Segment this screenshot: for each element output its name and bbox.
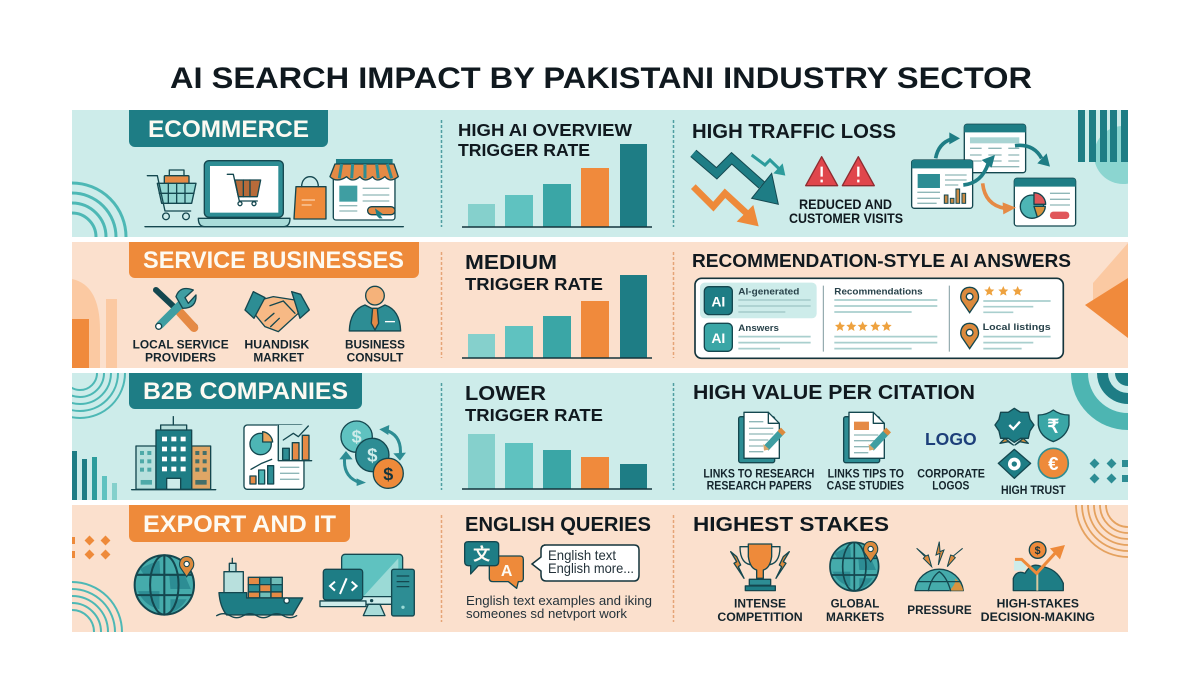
panel: export and IT row	[72, 505, 1128, 632]
dashed dividers	[442, 120, 674, 227]
icon: high-stakes decisions: $	[1035, 545, 1041, 557]
heading: B2B companies: B2B COMPANIES	[143, 378, 348, 405]
text: english examples: someones sd netvport work	[466, 606, 628, 621]
icon: trust badges	[995, 408, 1069, 478]
panel: B2B companies row	[72, 373, 1128, 500]
bar chart: medium trigger rate	[462, 275, 652, 358]
text: reduced customer visits: REDUCED AND	[799, 196, 892, 212]
bar chart: lower trigger rate	[462, 434, 652, 489]
heading: recommendation-style AI answers: RECOMMENDATION-STYLE AI ANSWERS	[692, 251, 1071, 271]
text: stakes labels: COMPETITION	[717, 610, 803, 624]
text: service labels: LOCAL SERVICE	[133, 337, 229, 351]
icon: business consultant	[349, 286, 401, 331]
text: service labels: CONSULT	[347, 351, 404, 365]
text: service labels: BUSINESS	[345, 337, 405, 351]
icon: translation bubbles: 文	[473, 544, 490, 564]
text: stakes labels	[717, 596, 1095, 624]
text: english examples: English text examples and iking	[466, 593, 652, 608]
icon: ecommerce shopping scene	[145, 159, 403, 227]
icon: high-stakes decisions	[1013, 542, 1065, 591]
icon: wrench and screwdriver	[156, 288, 196, 329]
icon: research document	[739, 412, 783, 463]
text: citation labels: LOGOS	[932, 478, 969, 492]
heading: ecommerce: ECOMMERCE	[148, 116, 309, 143]
speech bubble: english text: English more...	[548, 560, 634, 576]
text: stakes labels: PRESSURE	[907, 603, 972, 617]
dashed dividers	[442, 252, 674, 358]
icon: currency exchange: $	[352, 427, 362, 447]
text: service labels	[133, 337, 405, 365]
text: lower trigger rate: TRIGGER RATE	[465, 405, 603, 425]
speech bubble: english text: English text	[548, 547, 616, 563]
icon: browser windows with arrows	[912, 124, 1076, 226]
icon: business report	[244, 425, 312, 489]
heading: ecommerce	[129, 110, 328, 147]
icon: currency exchange	[339, 421, 406, 488]
AI badge: generated	[704, 287, 732, 315]
dashed dividers	[442, 383, 674, 490]
divider text: ecommerce trigger rate: HIGH AI OVERVIEW	[458, 120, 633, 140]
card: AI answers summary	[695, 278, 1063, 358]
icon: currency exchange: $	[383, 464, 393, 484]
panel: service businesses row	[72, 242, 1128, 368]
logo placeholder: LOGO	[925, 429, 977, 449]
text: citation labels: HIGH TRUST	[1001, 483, 1066, 497]
divider text: ecommerce trigger rate: TRIGGER RATE	[458, 140, 590, 160]
icon: trophy	[731, 544, 789, 591]
text: stakes labels: HIGH-STAKES	[997, 596, 1079, 610]
text: citation labels	[703, 466, 1066, 497]
text: reduced customer visits: CUSTOMER VISITS	[789, 210, 903, 226]
AI badge: answers: AI	[711, 330, 725, 346]
panel: ecommerce row	[72, 110, 1128, 237]
text: medium trigger rate: TRIGGER RATE	[465, 274, 603, 294]
text: stakes labels: INTENSE	[734, 596, 786, 610]
card: AI answers summary: AI-generated	[738, 286, 800, 296]
speech bubble: english text	[532, 545, 639, 581]
heading: high traffic loss: HIGH TRAFFIC LOSS	[692, 121, 896, 143]
text: reduced customer visits	[789, 196, 903, 226]
text: citation labels: RESEARCH PAPERS	[707, 478, 812, 492]
divider text: ecommerce trigger rate	[458, 120, 633, 160]
card: AI answers summary: Answers	[738, 323, 779, 333]
icon: office buildings	[132, 417, 216, 490]
card: AI answers summary: Local listings	[983, 322, 1051, 332]
icon: case study document	[844, 412, 889, 463]
icon: globe with pin	[135, 555, 194, 615]
text: medium trigger rate: MEDIUM	[465, 252, 557, 274]
bar chart: high trigger rate	[462, 144, 652, 227]
text: service labels: MARKET	[253, 351, 304, 365]
text: stakes labels: MARKETS	[826, 610, 884, 624]
heading: B2B companies	[129, 373, 362, 409]
text: stakes labels: GLOBAL	[831, 596, 880, 610]
heading: export and IT	[129, 505, 350, 542]
heading: export and IT: EXPORT AND IT	[143, 511, 336, 538]
heading: service businesses	[129, 242, 419, 278]
heading: highest stakes: HIGHEST STAKES	[693, 514, 889, 536]
icon: trust badges: €	[1048, 453, 1059, 474]
icon: cargo ship	[217, 558, 303, 618]
AI badge: answers	[704, 323, 732, 351]
icon: warning triangles	[806, 157, 874, 186]
card: AI answers summary: Recommendations	[834, 286, 923, 296]
text: stakes labels: DECISION-MAKING	[981, 610, 1095, 624]
heading: english queries: ENGLISH QUERIES	[465, 514, 651, 536]
heading: service businesses: SERVICE BUSINESSES	[143, 247, 404, 274]
icon: trust badges: ₹	[1047, 415, 1059, 436]
icon: global markets	[830, 542, 879, 591]
text: citation labels: LINKS TO RESEARCH	[703, 466, 814, 480]
text: citation labels: CORPORATE	[917, 466, 985, 480]
text: citation labels: LINKS TIPS TO	[828, 466, 904, 480]
icon: translation bubbles: A	[501, 563, 513, 580]
text: medium trigger rate	[465, 252, 603, 294]
dashed dividers	[442, 515, 674, 622]
text: citation labels: CASE STUDIES	[827, 478, 904, 492]
title: AI SEARCH IMPACT BY PAKISTANI INDUSTRY SECTOR	[170, 62, 1032, 95]
heading: high value per citation: HIGH VALUE PER CITATION	[693, 382, 975, 404]
icon: handshake	[245, 292, 309, 332]
icon: pressure	[915, 542, 963, 591]
AI badge: generated: AI	[711, 293, 725, 309]
icon: currency exchange: $	[367, 445, 378, 466]
text: service labels: PROVIDERS	[145, 351, 216, 365]
text: lower trigger rate	[465, 383, 603, 425]
icon: falling traffic arrows	[693, 153, 785, 226]
text: lower trigger rate: LOWER	[465, 383, 547, 405]
text: service labels: HUANDISK	[244, 337, 309, 351]
icon: computers and code	[320, 554, 414, 616]
text: english examples	[466, 593, 652, 621]
icon: translation bubbles	[465, 542, 523, 588]
